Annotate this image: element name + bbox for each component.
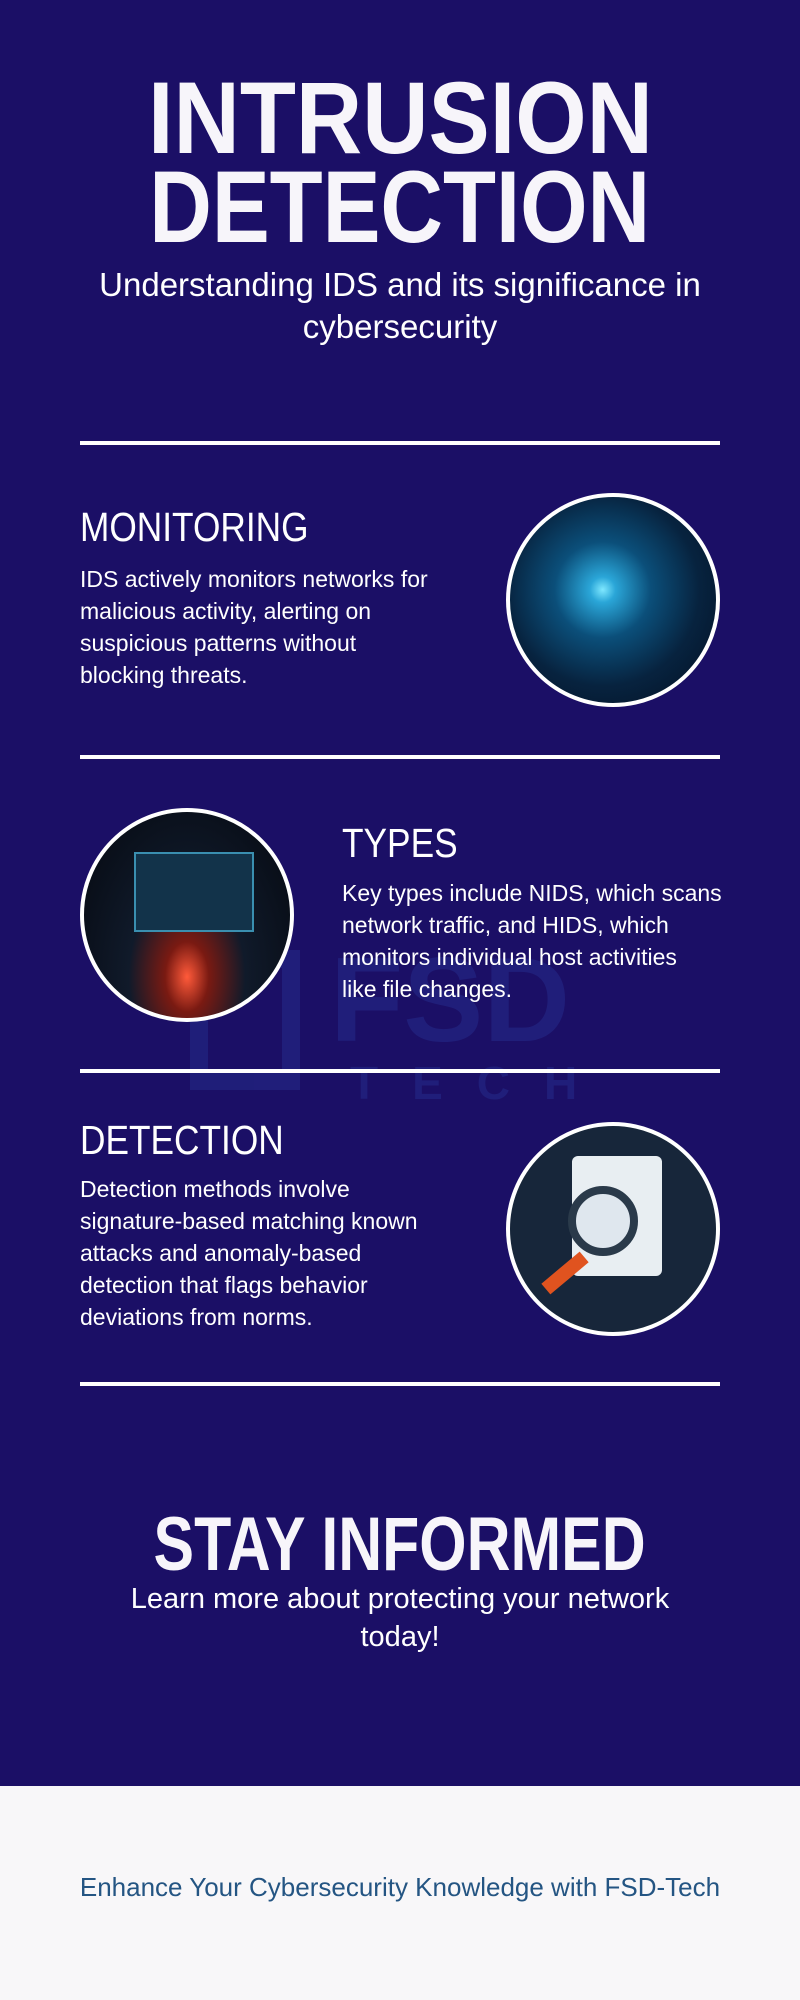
section: monitoring	[80, 504, 428, 688]
title: INTRUSION	[148, 61, 652, 175]
text: types: network traffic, and HIDS, which	[342, 912, 669, 938]
text: types	[342, 880, 722, 1002]
watermark: FSD	[330, 933, 570, 1067]
image: computer	[80, 808, 294, 1022]
image: magnifier document	[506, 1122, 720, 1336]
text: detection: Detection methods involve signature‑based matching known attacks and anomaly‑based detection that flags behavior deviations from norms.	[80, 1176, 418, 1330]
text: types: monitors individual host activities	[342, 944, 677, 970]
footer text: Enhance Your Cybersecurity Knowledge with FSD-Tech	[80, 1872, 720, 1902]
heading: types: TYPES	[342, 820, 458, 866]
section: types	[342, 820, 722, 1002]
title	[148, 61, 652, 264]
heading: detection: DETECTION	[80, 1117, 284, 1163]
watermark: TECH	[350, 1057, 611, 1109]
text: types: like file changes.	[342, 976, 512, 1002]
watermark	[190, 933, 611, 1109]
image: network globe	[506, 493, 720, 707]
subtitle: Understanding IDS and its significance in cybersecurity	[99, 266, 701, 345]
text: call to action: Learn more about protecting your network today!	[131, 1583, 669, 1653]
heading: stay informed: STAY INFORMED	[154, 1502, 646, 1587]
text: monitoring: IDS actively monitors networks for malicious activity, alerting on suspicious patterns without blocking threats.	[80, 566, 428, 688]
title: DETECTION	[150, 150, 650, 264]
heading: monitoring: MONITORING	[80, 504, 309, 550]
text: types: Key types include NIDS, which scans	[342, 880, 722, 906]
section: detection	[80, 1117, 418, 1330]
